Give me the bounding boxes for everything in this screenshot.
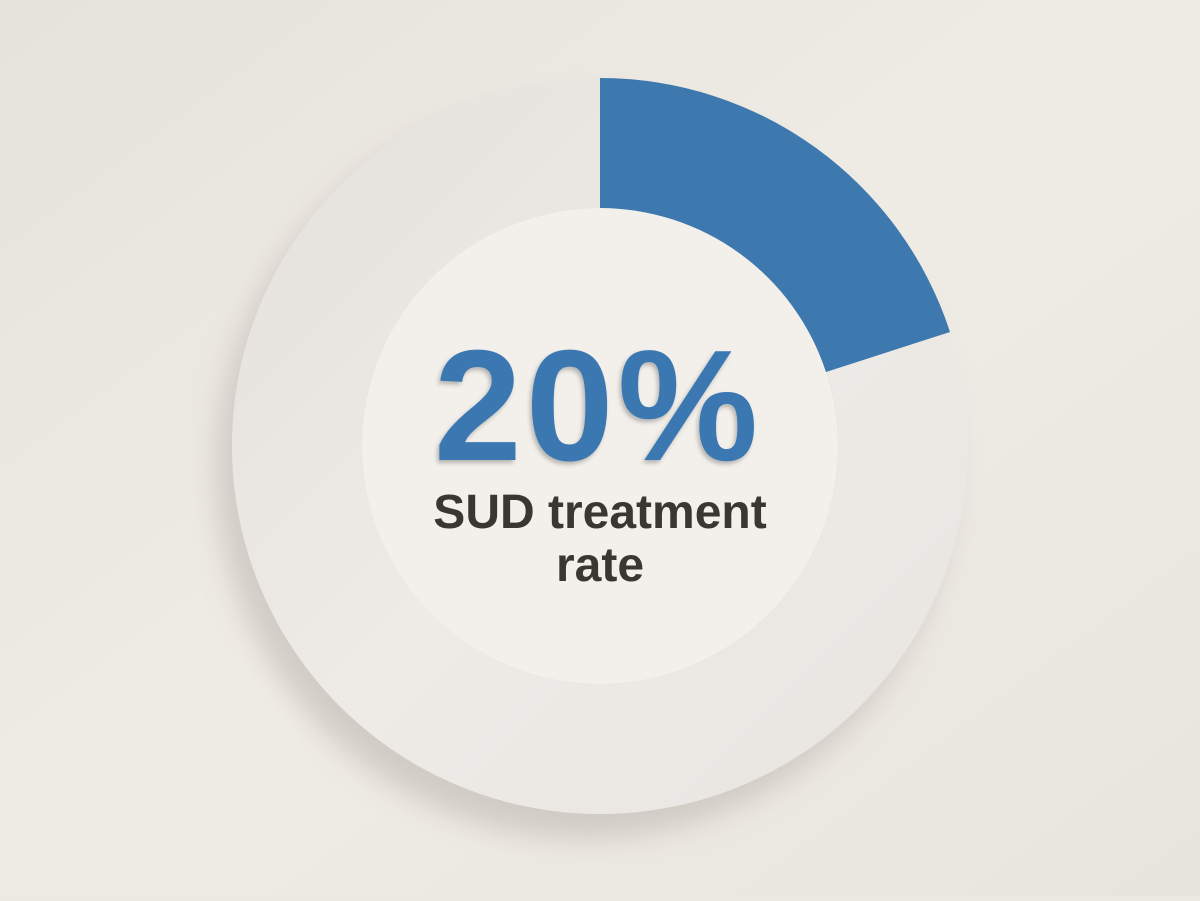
donut chart: [232, 78, 968, 814]
label: SUD treatment: [433, 486, 767, 539]
ring shadow: [217, 102, 953, 838]
ring: blue segment 20%: [600, 78, 950, 372]
label: [433, 486, 767, 592]
ring: grey track: [232, 78, 968, 814]
ring: inner hole: [362, 208, 838, 684]
label: rate: [556, 539, 644, 592]
percent value: 20%: [434, 318, 762, 494]
